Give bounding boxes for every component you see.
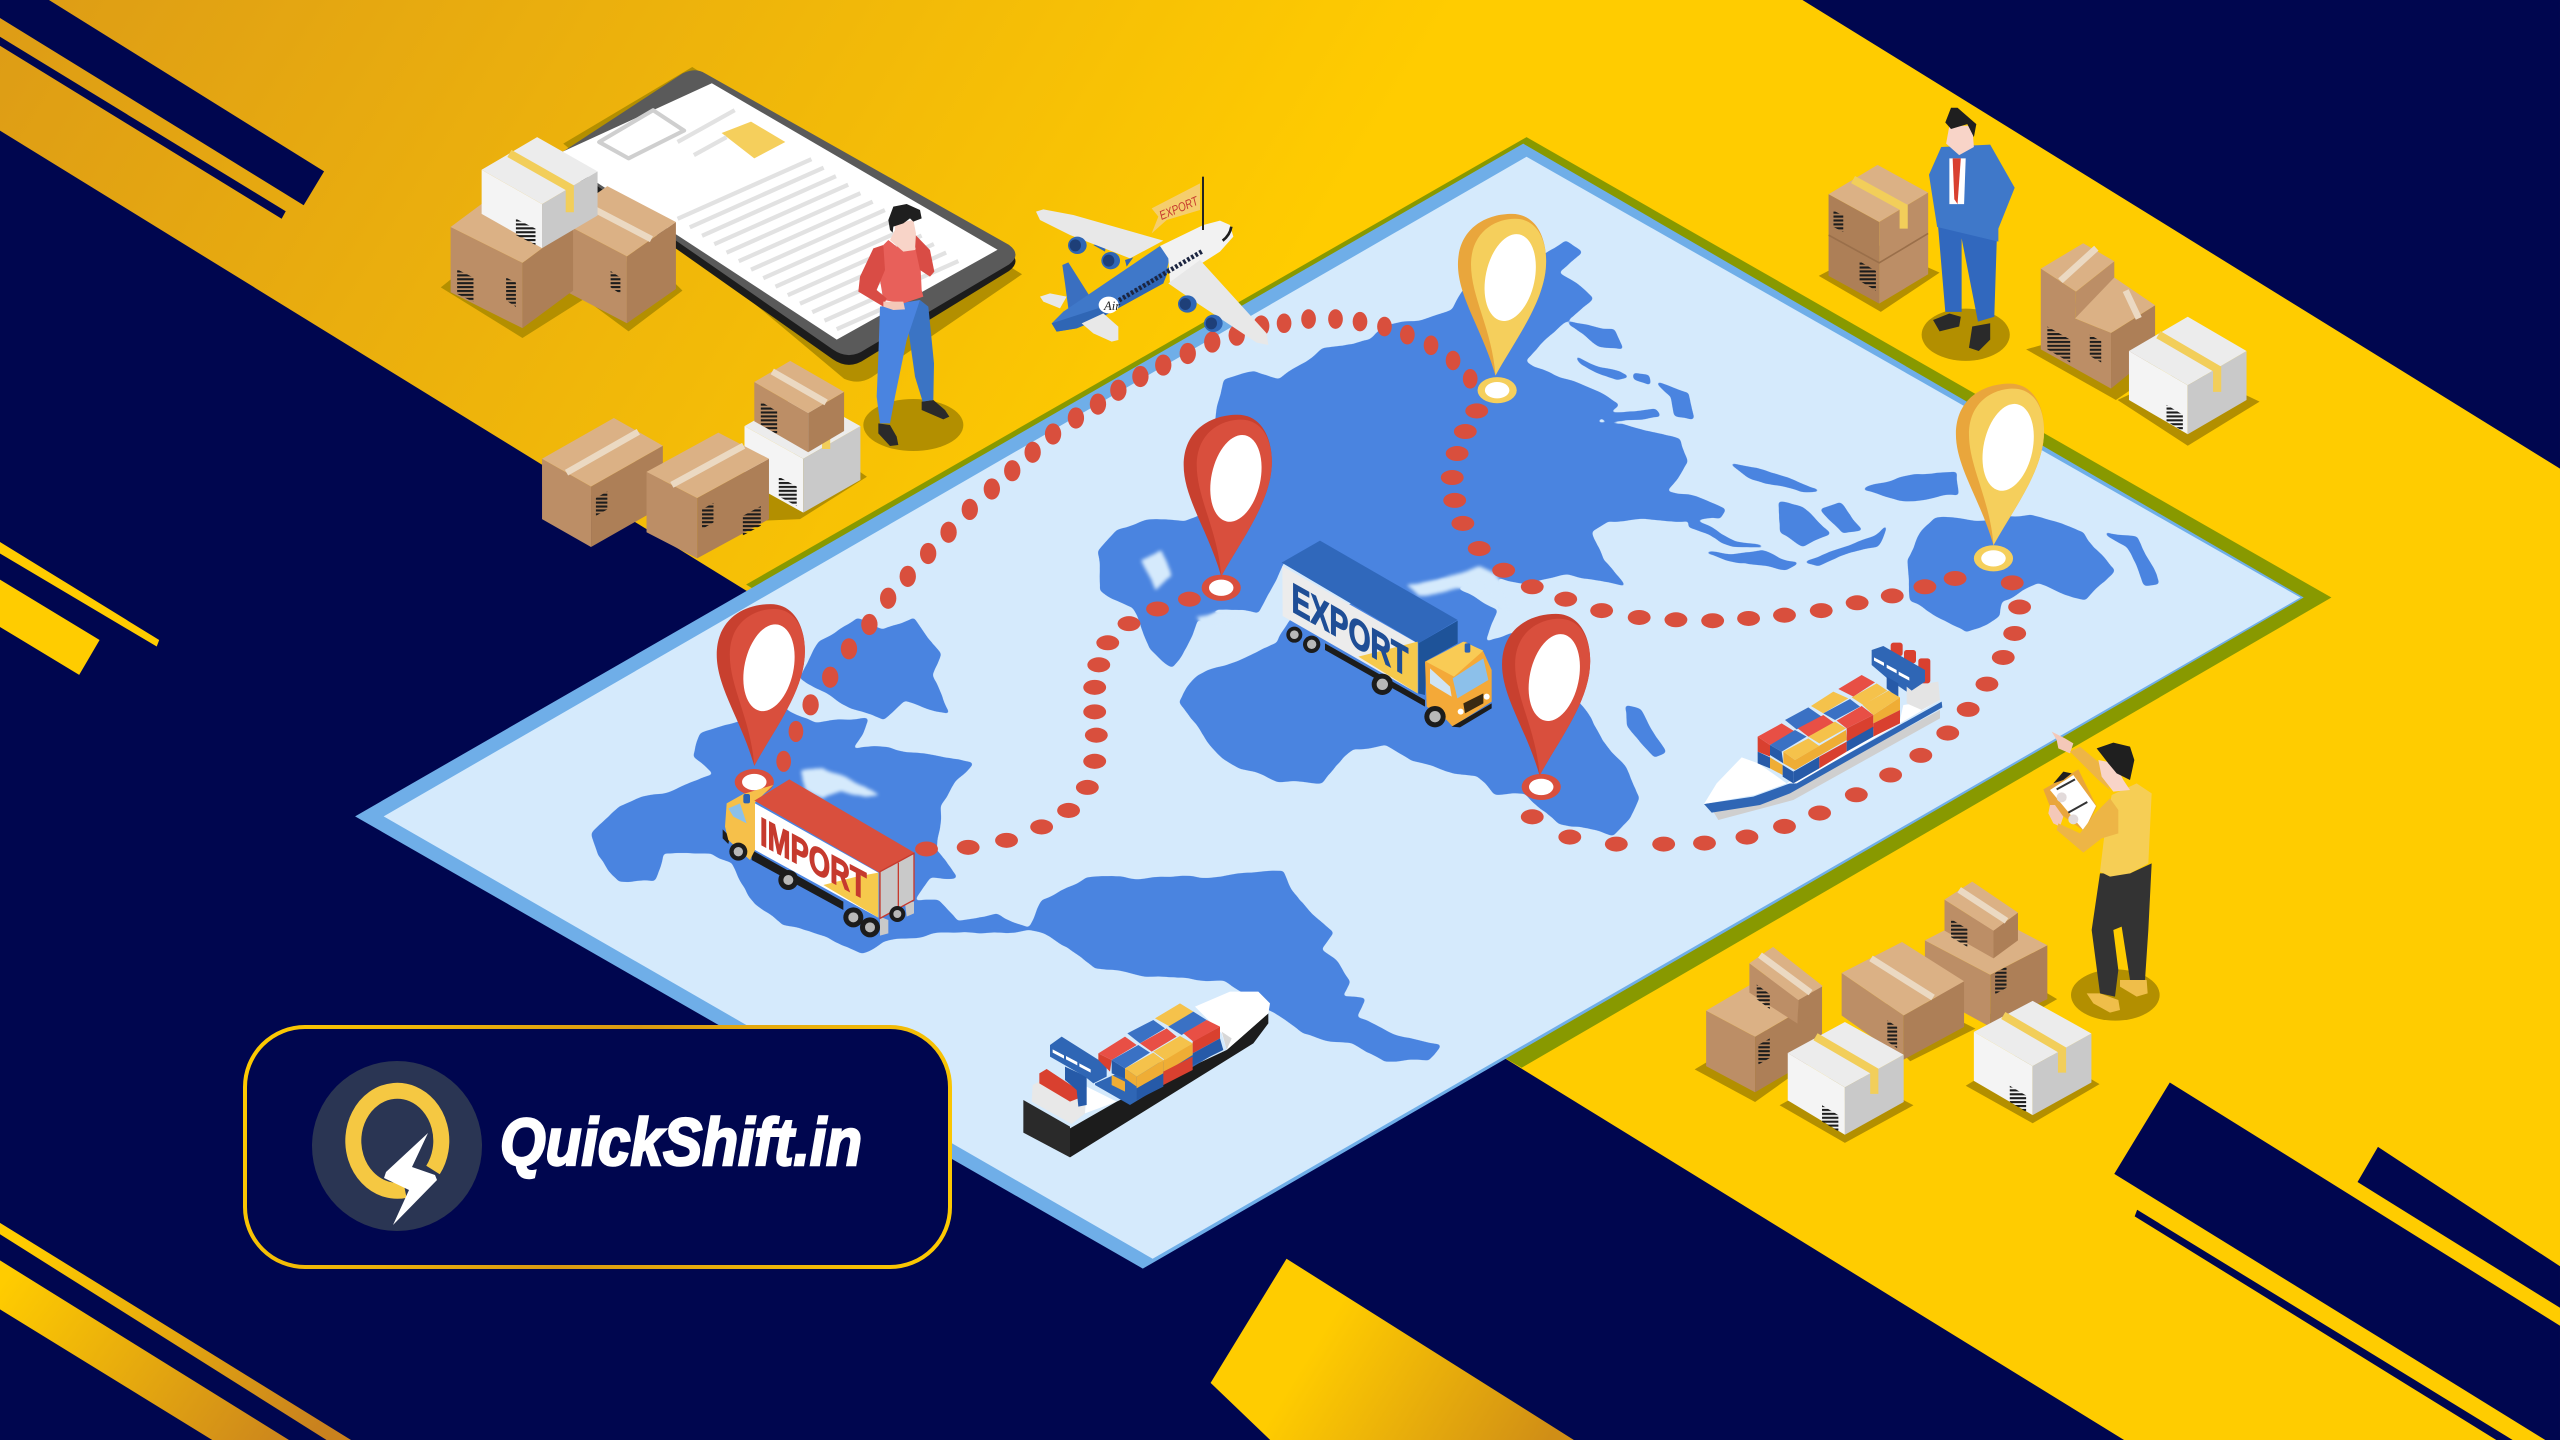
brand logo panel: [245, 1027, 950, 1267]
worker in blue suit: [1922, 108, 2015, 361]
continents: [593, 242, 2157, 1058]
route dots: plane to import pin: [776, 315, 1269, 772]
import truck: IMPORT: [760, 808, 867, 909]
container ship: white hull, right: [1704, 643, 1942, 820]
airplane: [1036, 177, 1268, 345]
export truck: [1282, 541, 1492, 727]
parcels: bottom right group: [1695, 882, 2100, 1143]
export truck: EXPORT: [1292, 575, 1408, 686]
route dots: plane to north pin: [1277, 309, 1478, 389]
pin: red, south: [1502, 614, 1590, 800]
route dots: north pin to east pin and south pin: [1441, 403, 2031, 852]
pin: yellow, east: [1956, 384, 2044, 571]
airplane: EXPORT: [1157, 194, 1201, 223]
airplane: Air: [1103, 299, 1120, 313]
parcels: top left stack: [441, 137, 682, 338]
pin: yellow, north: [1458, 214, 1546, 403]
world map panel: [355, 137, 2331, 1269]
route dots: west pin to import truck: [915, 592, 1201, 856]
logo icon: [312, 1061, 482, 1231]
wordmark: QuickShift.in: [500, 1105, 862, 1180]
parcels: top right stacks: [1819, 165, 2260, 446]
pin: red, centre left: [1184, 415, 1272, 601]
import truck: [723, 779, 914, 937]
clipboard document: [555, 67, 1022, 382]
container ship: black hull, bottom: [1023, 992, 1270, 1157]
worker in red shirt: [858, 204, 963, 451]
worker in yellow shirt with clipboard: [2043, 732, 2160, 1021]
parcels: lower group beside first worker: [542, 361, 867, 558]
pin: red, far left: [717, 604, 805, 795]
